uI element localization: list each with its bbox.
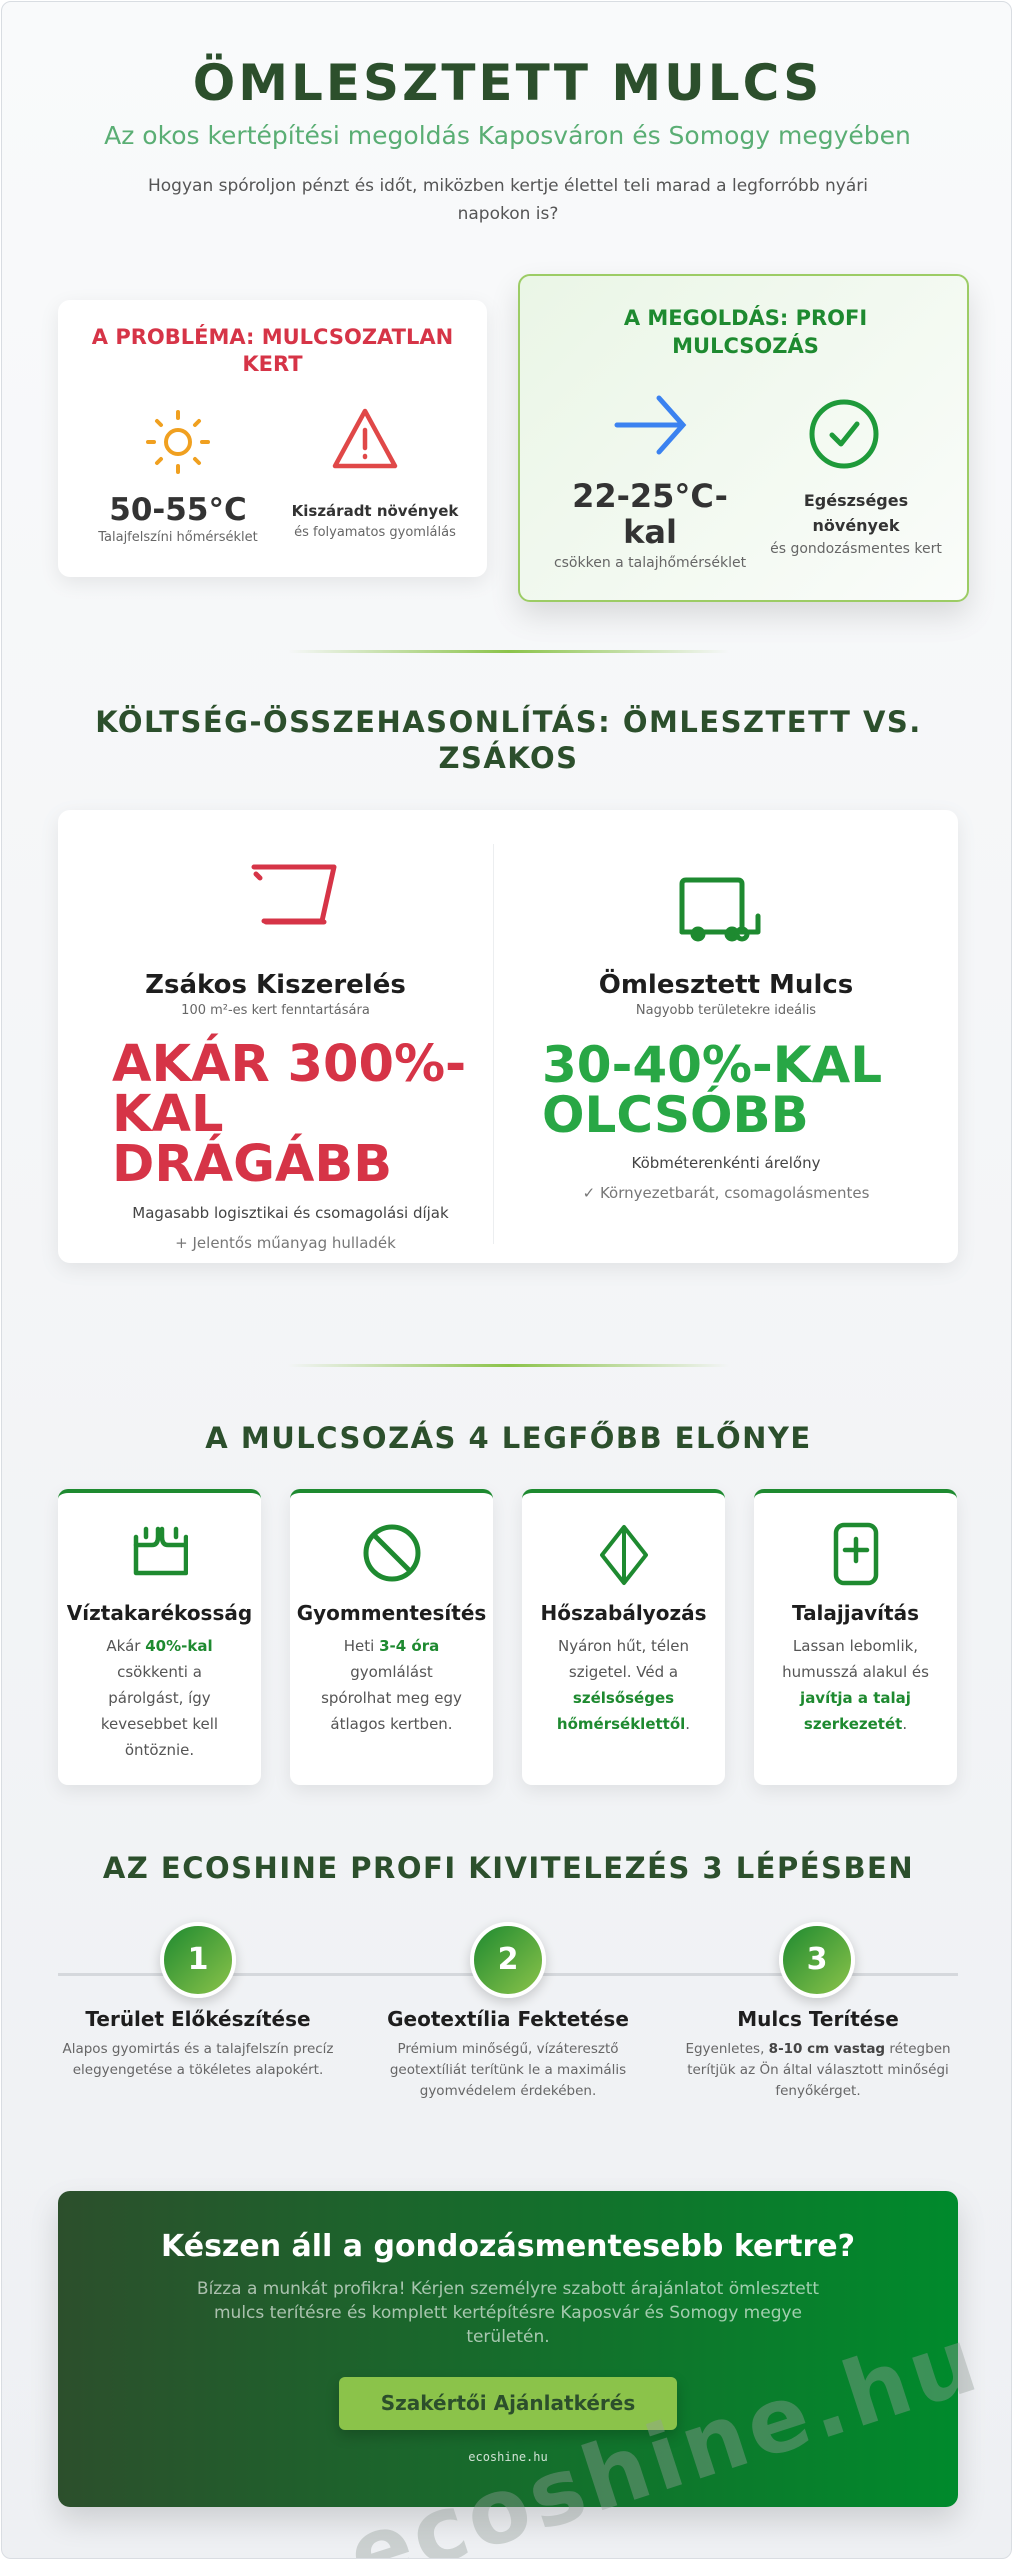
stat: dry plants: és folyamatos gyomlálás [294, 525, 456, 540]
benefit: water: Víztakarékosság [67, 1601, 252, 1625]
panel: problem [58, 300, 487, 577]
benefit: heat [522, 1489, 725, 1785]
cta text: Bízza a munkát profikra! Kérjen személyre szabott árajánlatot ömlesztett mulcs terítésre és komplett kertépítésre Kaposvár és Somogy megye területén. [197, 2279, 819, 2347]
step 2: Geotextília Fektetése [387, 2007, 629, 2031]
icon: check [810, 400, 878, 468]
step 2: Prémium minőségű, vízáteresztő geotextíliát terítünk le a maximális gyomvédelem érdekében. [390, 2041, 626, 2099]
stat: temp [98, 492, 258, 545]
panel: solution [518, 274, 969, 602]
stat: cooled temp: 22-25°C-kal [572, 477, 728, 551]
stat: cooled temp [554, 477, 746, 571]
stat: dry plants: Kiszáradt növények [292, 502, 458, 520]
benefit: soil [754, 1489, 957, 1785]
step 3 badge [779, 1922, 855, 1998]
step 2 badge: 2 [498, 1942, 518, 1977]
stat: cooled temp: csökken a talajhőmérséklet [554, 555, 746, 571]
stat: healthy plants [770, 491, 942, 557]
benefit: weeds [290, 1489, 493, 1785]
icon: cart [252, 864, 336, 924]
benefit: water: Akár 40%-kal csökkenti a párolgást, így kevesebbet kell öntöznie. [101, 1637, 218, 1759]
stat: dry plants [292, 502, 458, 540]
heading: benefits: A MULCSOZÁS 4 LEGFŐBB ELŐNYE [205, 1421, 812, 1455]
icon: arrow [614, 396, 686, 454]
step 3: Mulcs Terítése [737, 2007, 899, 2031]
benefit: soil: Lassan lebomlik, humusszá alakul és javítja a talaj szerkezetét. [782, 1637, 929, 1733]
panel: call to action [58, 2191, 958, 2507]
column: bulk: Köbméterenkénti árelőny [631, 1154, 820, 1172]
panel: cost comparison [58, 810, 958, 1263]
stat: healthy plants: Egészséges növények [804, 491, 908, 535]
heading: cost comparison: KÖLTSÉG-ÖSSZEHASONLÍTÁS: ÖMLESZTETT VS. ZSÁKOS [95, 705, 922, 775]
title: ÖMLESZTETT MULCS [193, 54, 822, 112]
cta heading: Készen áll a gondozásmentesebb kertre? [161, 2229, 855, 2264]
step 1: Alapos gyomirtás és a talajfelszín precíz elegyengetése a tökéletes alapokért. [62, 2041, 334, 2078]
stat: healthy plants: és gondozásmentes kert [770, 541, 942, 557]
benefit: heat: Nyáron hűt, télen szigetel. Véd a szélsőséges hőmérséklettől. [557, 1637, 690, 1733]
cta button [339, 2377, 677, 2430]
step 1 badge [160, 1922, 236, 1998]
intro text: Hogyan spóroljon pénzt és időt, miközben kertje élettel teli marad a legforróbb nyári napokon is? [148, 176, 868, 224]
step 3 badge: 3 [807, 1942, 827, 1977]
column: bagged: Zsákos Kiszerelés [145, 970, 406, 1000]
icon: warning [332, 408, 398, 468]
step 2 [387, 2007, 629, 2099]
column: bulk: ✓ Környezetbarát, csomagolásmentes [583, 1184, 869, 1202]
problem heading: A PROBLÉMA: MULCSOZATLAN KERT [92, 325, 453, 376]
column: bagged: + Jelentős műanyag hulladék [175, 1234, 396, 1252]
stat: temp: Talajfelszíni hőmérséklet [98, 530, 258, 545]
step 2 badge [470, 1922, 546, 1998]
column: bulk: Nagyobb területekre ideális [636, 1003, 816, 1018]
column: bulk: Ömlesztett Mulcs [599, 970, 853, 1000]
step 1 [62, 2007, 334, 2078]
icon: sun [146, 410, 210, 474]
benefit: water [58, 1489, 261, 1785]
benefit: soil: Talajjavítás [792, 1601, 919, 1625]
big stat: cheaper: 30-40%-KAL OLCSÓBB [542, 1036, 882, 1144]
benefit: heat: Hőszabályozás [540, 1601, 706, 1625]
stat: temp: 50-55°C [109, 492, 247, 528]
column: bagged: 100 m²-es kert fenntartására [181, 1003, 370, 1018]
step 1 badge: 1 [188, 1942, 208, 1977]
heading: steps: AZ ECOSHINE PROFI KIVITELEZÉS 3 LÉPÉSBEN [103, 1851, 914, 1885]
cta button: Szakértői Ajánlatkérés [381, 2391, 635, 2415]
solution heading: A MEGOLDÁS: PROFI MULCSOZÁS [624, 306, 867, 358]
column: bulk [542, 968, 882, 1202]
step 3: Egyenletes, 8-10 cm vastag rétegben terítjük az Ön által választott minőségi fenyőkérget. [685, 2041, 951, 2099]
column: bagged [112, 970, 466, 1252]
benefit: weeds: Gyommentesítés [297, 1601, 486, 1625]
big stat: more expensive: AKÁR 300%-KAL DRÁGÁBB [112, 1035, 466, 1194]
steps timeline [58, 1973, 958, 1976]
footer url: ecoshine.hu [468, 2450, 548, 2464]
subtitle: Az okos kertépítési megoldás Kaposváron és Somogy megyében [104, 121, 911, 150]
column: bagged: Magasabb logisztikai és csomagolási díjak [132, 1204, 449, 1222]
icon: truck [680, 878, 760, 942]
benefit: weeds: Heti 3-4 óra gyomlálást spórolhat meg egy átlagos kertben. [321, 1637, 462, 1733]
step 3 [685, 2007, 951, 2099]
step 1: Terület Előkészítése [85, 2007, 311, 2031]
